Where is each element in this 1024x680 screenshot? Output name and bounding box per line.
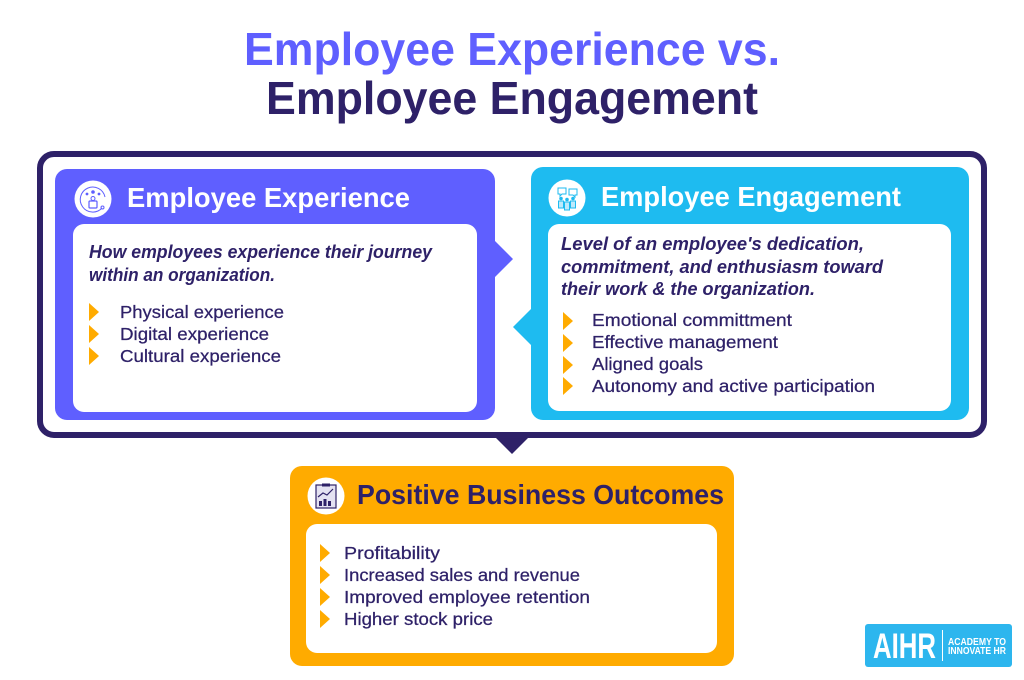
description: Level of an employee's dedication, [561,234,864,254]
list: Physical experience [120,302,284,322]
description: within an organization. [89,265,275,285]
heading: Employee Engagement [601,181,901,212]
description: How employees experience their journey [89,242,433,262]
list: Profitability [344,543,440,563]
title: Employee Experience vs. [244,23,780,75]
list: Digital experience [120,324,269,344]
text card [306,524,717,653]
panel background with arrow [513,167,969,420]
list: Autonomy and active participation [592,376,875,396]
description [89,242,433,285]
panel: positive business outcomes [290,466,734,666]
logo: AIHR [865,624,1012,667]
logo: AIHR: ACADEMY TO [948,637,1006,648]
panel background [290,466,734,666]
list: Improved employee retention [344,587,590,607]
logo: AIHR: INNOVATE HR [948,646,1007,657]
description: commitment, and enthusiasm toward [561,257,884,277]
list: Higher stock price [344,609,493,629]
outer frame [40,154,984,435]
panel background with arrow [55,169,513,420]
description [561,234,884,299]
list: Cultural experience [120,346,281,366]
list [320,543,590,629]
icon: employee with stars [74,180,112,218]
icon: clipboard chart [308,478,344,514]
text card [73,224,477,412]
description: their work & the organization. [561,279,815,299]
heading: Positive Business Outcomes [357,479,724,510]
list [89,302,284,366]
logo: AIHR: AIHR [873,627,936,666]
icon: team with speech bubbles [548,180,586,216]
text card [548,224,951,411]
heading: Employee Experience [127,182,410,213]
arrow: down to outcomes [495,437,529,454]
list: Increased sales and revenue [344,565,580,585]
list [563,310,875,396]
list: Emotional committment [592,310,792,330]
list: Effective management [592,332,778,352]
title: Employee Engagement [266,72,758,124]
title [244,23,780,124]
panel: employee engagement [513,167,969,420]
panel: employee experience [55,169,513,420]
list: Aligned goals [592,354,703,374]
